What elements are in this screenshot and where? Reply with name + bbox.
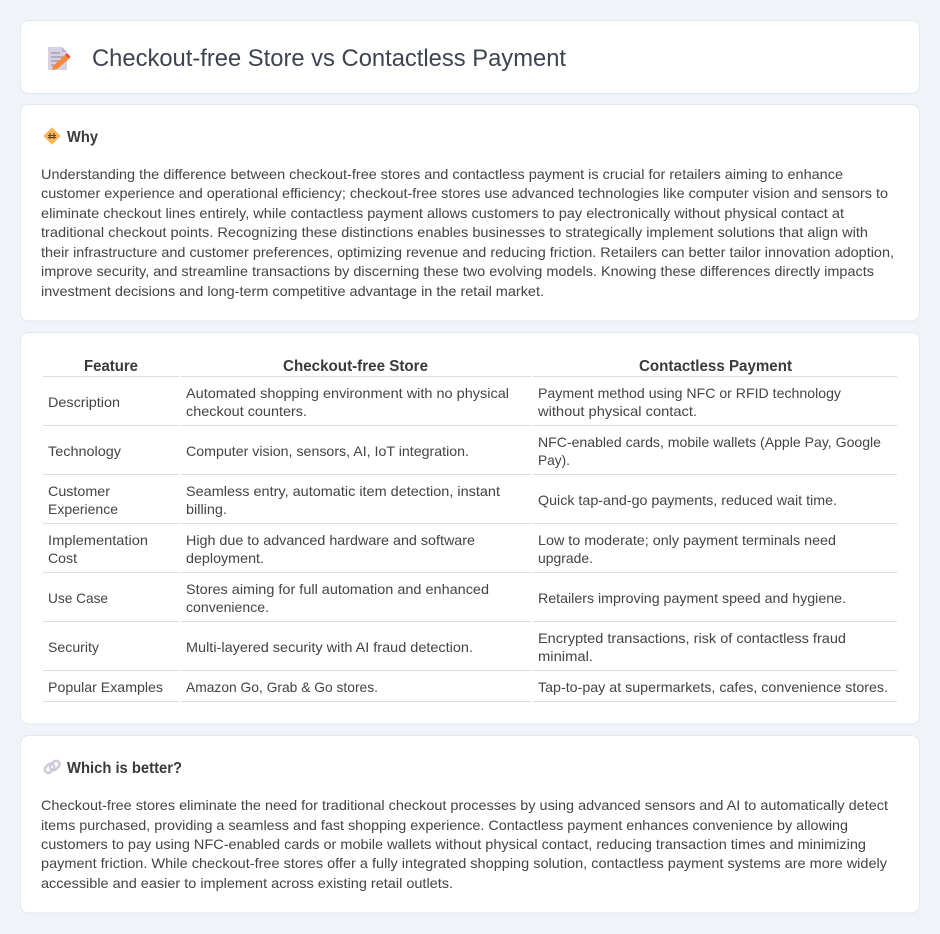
row: security <box>48 630 846 664</box>
row: popular examples: Tap-to-pay at supermarkets, cafes, convenience stores. <box>538 679 888 695</box>
row: customer experience <box>48 483 837 517</box>
panel: why <box>20 104 920 321</box>
icon: memo with pencil <box>48 47 70 70</box>
text block: why paragraph: customer experience and operational efficiency; checkout-free stores use advanced technologies like computer vision and sensors to <box>41 185 888 201</box>
row: security: Encrypted transactions, risk of contactless fraud <box>538 630 846 646</box>
row: use case: convenience. <box>186 599 269 615</box>
panel: comparison table <box>20 332 920 724</box>
text block: which is better paragraph: customers to pay using NFC-enabled cards or mobile wallets without physical contact, reducing transaction times and minimizing <box>41 836 866 852</box>
row: implementation cost: High due to advanced hardware and software <box>186 532 475 548</box>
row: customer experience: Seamless entry, automatic item detection, instant <box>186 483 500 499</box>
row: description: Description <box>48 394 120 410</box>
row: description: Payment method using NFC or RFID technology <box>538 385 841 401</box>
heading: why: Why <box>67 129 98 146</box>
row: security: Security <box>48 639 99 655</box>
row: popular examples <box>48 679 888 695</box>
text block: which is better paragraph: items purchased, providing a seamless and fast shopping experience. Contactless payment enhances convenience by allowing <box>41 817 848 833</box>
row: popular examples: Popular Examples <box>48 679 163 695</box>
text block: which is better paragraph: accessible and easier to implement across existing retail outlets. <box>41 875 453 891</box>
row: customer experience: Quick tap-and-go payments, reduced wait time. <box>538 492 837 508</box>
text block: why paragraph: improve security, and streamline transactions by discerning these two evolving models. Knowing these differences directly impacts <box>41 263 874 279</box>
row: technology <box>48 434 881 468</box>
row: use case: Stores aiming for full automation and enhanced <box>186 581 489 597</box>
row: implementation cost: Implementation <box>48 532 148 548</box>
row: use case: Use Case <box>48 590 108 606</box>
table header row: Feature <box>84 358 138 375</box>
row: customer experience: billing. <box>186 501 227 517</box>
row: implementation cost: deployment. <box>186 550 264 566</box>
row: description: without physical contact. <box>537 403 697 419</box>
table header row: Checkout-free Store <box>283 358 428 375</box>
row: customer experience: Customer <box>48 483 110 499</box>
text block: why paragraph: traditional checkout points. Recognizing these distinctions enables businesses to strategically implement solutions that align with <box>41 224 868 240</box>
table header row: Contactless Payment <box>639 358 793 375</box>
text block: why paragraph <box>41 166 894 299</box>
text block: which is better paragraph: Checkout-free stores eliminate the need for traditional checkout processes by using advanced sensors and AI to automatically detect <box>41 797 888 813</box>
panel: title header <box>20 20 920 94</box>
row: security: minimal. <box>538 648 593 664</box>
title: Checkout-free Store vs Contactless Payment <box>92 45 566 72</box>
text block: which is better paragraph: payment friction. While checkout-free stores offer a fully integrated shopping solution, contactless payment systems are more widely <box>41 855 887 871</box>
row: description: Automated shopping environment with no physical <box>186 385 509 401</box>
row: implementation cost: Low to moderate; only payment terminals need <box>538 532 836 548</box>
row: use case <box>48 581 846 615</box>
row: security: Multi-layered security with AI fraud detection. <box>186 639 473 655</box>
row: description: checkout counters. <box>186 403 307 419</box>
row: customer experience: Experience <box>48 501 118 517</box>
text block: why paragraph: investment decisions and long-term competitive advantage in the retail market. <box>41 283 544 299</box>
row: use case: Retailers improving payment speed and hygiene. <box>538 590 846 606</box>
row: popular examples: Amazon Go, Grab & Go stores. <box>186 679 378 695</box>
text block: why paragraph: Understanding the difference between checkout-free stores and contactless payment is crucial for retailers aiming to enhance <box>41 166 843 182</box>
icon: chain link <box>43 759 61 774</box>
heading: which is better: Which is better? <box>67 760 182 777</box>
text block: why paragraph: eliminate checkout lines entirely, while contactless payment allows customers to pay electronically without physical contact at <box>41 205 844 221</box>
row: technology: NFC-enabled cards, mobile wallets (Apple Pay, Google <box>538 434 881 450</box>
row: technology: Technology <box>48 443 121 459</box>
text block: which is better paragraph <box>41 797 888 891</box>
row: implementation cost: Cost <box>48 550 77 566</box>
text block: why paragraph: their infrastructure and customer preferences, optimizing revenue and reducing friction. Retailers can better tailor innovation adoption, <box>41 244 894 260</box>
row: implementation cost <box>48 532 836 566</box>
row: description <box>48 385 841 419</box>
row: technology: Pay). <box>538 452 570 468</box>
panel: which is better <box>20 736 920 913</box>
row: implementation cost: upgrade. <box>538 550 593 566</box>
row: technology: Computer vision, sensors, AI, IoT integration. <box>186 443 469 459</box>
icon: warning diamond <box>44 128 60 144</box>
table header row <box>84 358 793 375</box>
